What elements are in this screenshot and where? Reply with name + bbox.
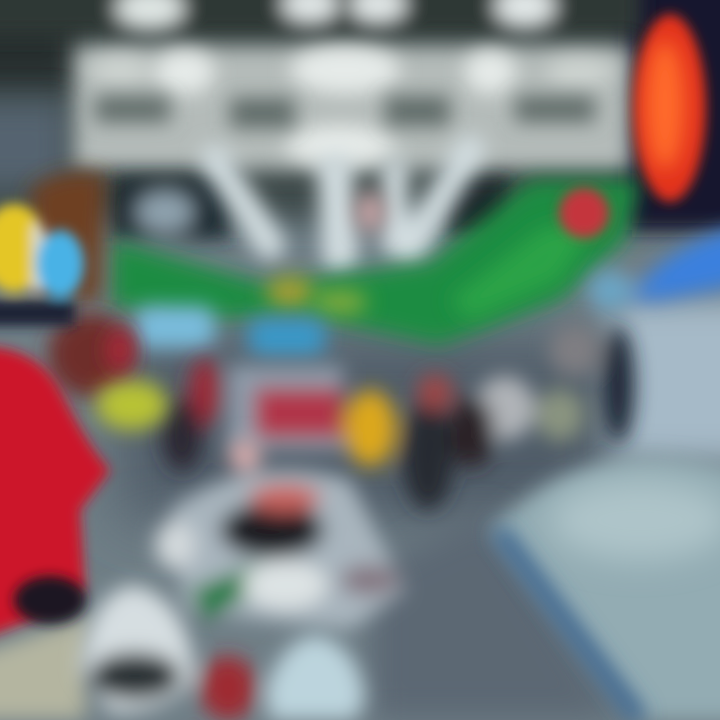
dark area below ceiling bbox=[112, 178, 510, 238]
bottom slate floor bbox=[370, 510, 620, 720]
pale ceiling panel bbox=[74, 46, 630, 170]
piled objects centre bbox=[155, 439, 405, 630]
green band bbox=[112, 180, 640, 345]
top row of lights bbox=[0, 0, 640, 36]
crowd middle bbox=[162, 324, 634, 510]
red ball on green band bbox=[559, 188, 609, 238]
white V beams bbox=[215, 150, 470, 255]
person in red bbox=[0, 172, 168, 650]
beige floor bottom-left bbox=[0, 615, 90, 720]
blue signs under band bbox=[135, 306, 326, 356]
blue shape right bbox=[588, 222, 720, 310]
helmets at bottom bbox=[80, 585, 365, 720]
red-orange oval bbox=[634, 14, 706, 202]
red dot in V bbox=[356, 192, 384, 232]
grey-blue dome bbox=[490, 458, 720, 720]
yellow and blue cap bbox=[0, 204, 84, 326]
